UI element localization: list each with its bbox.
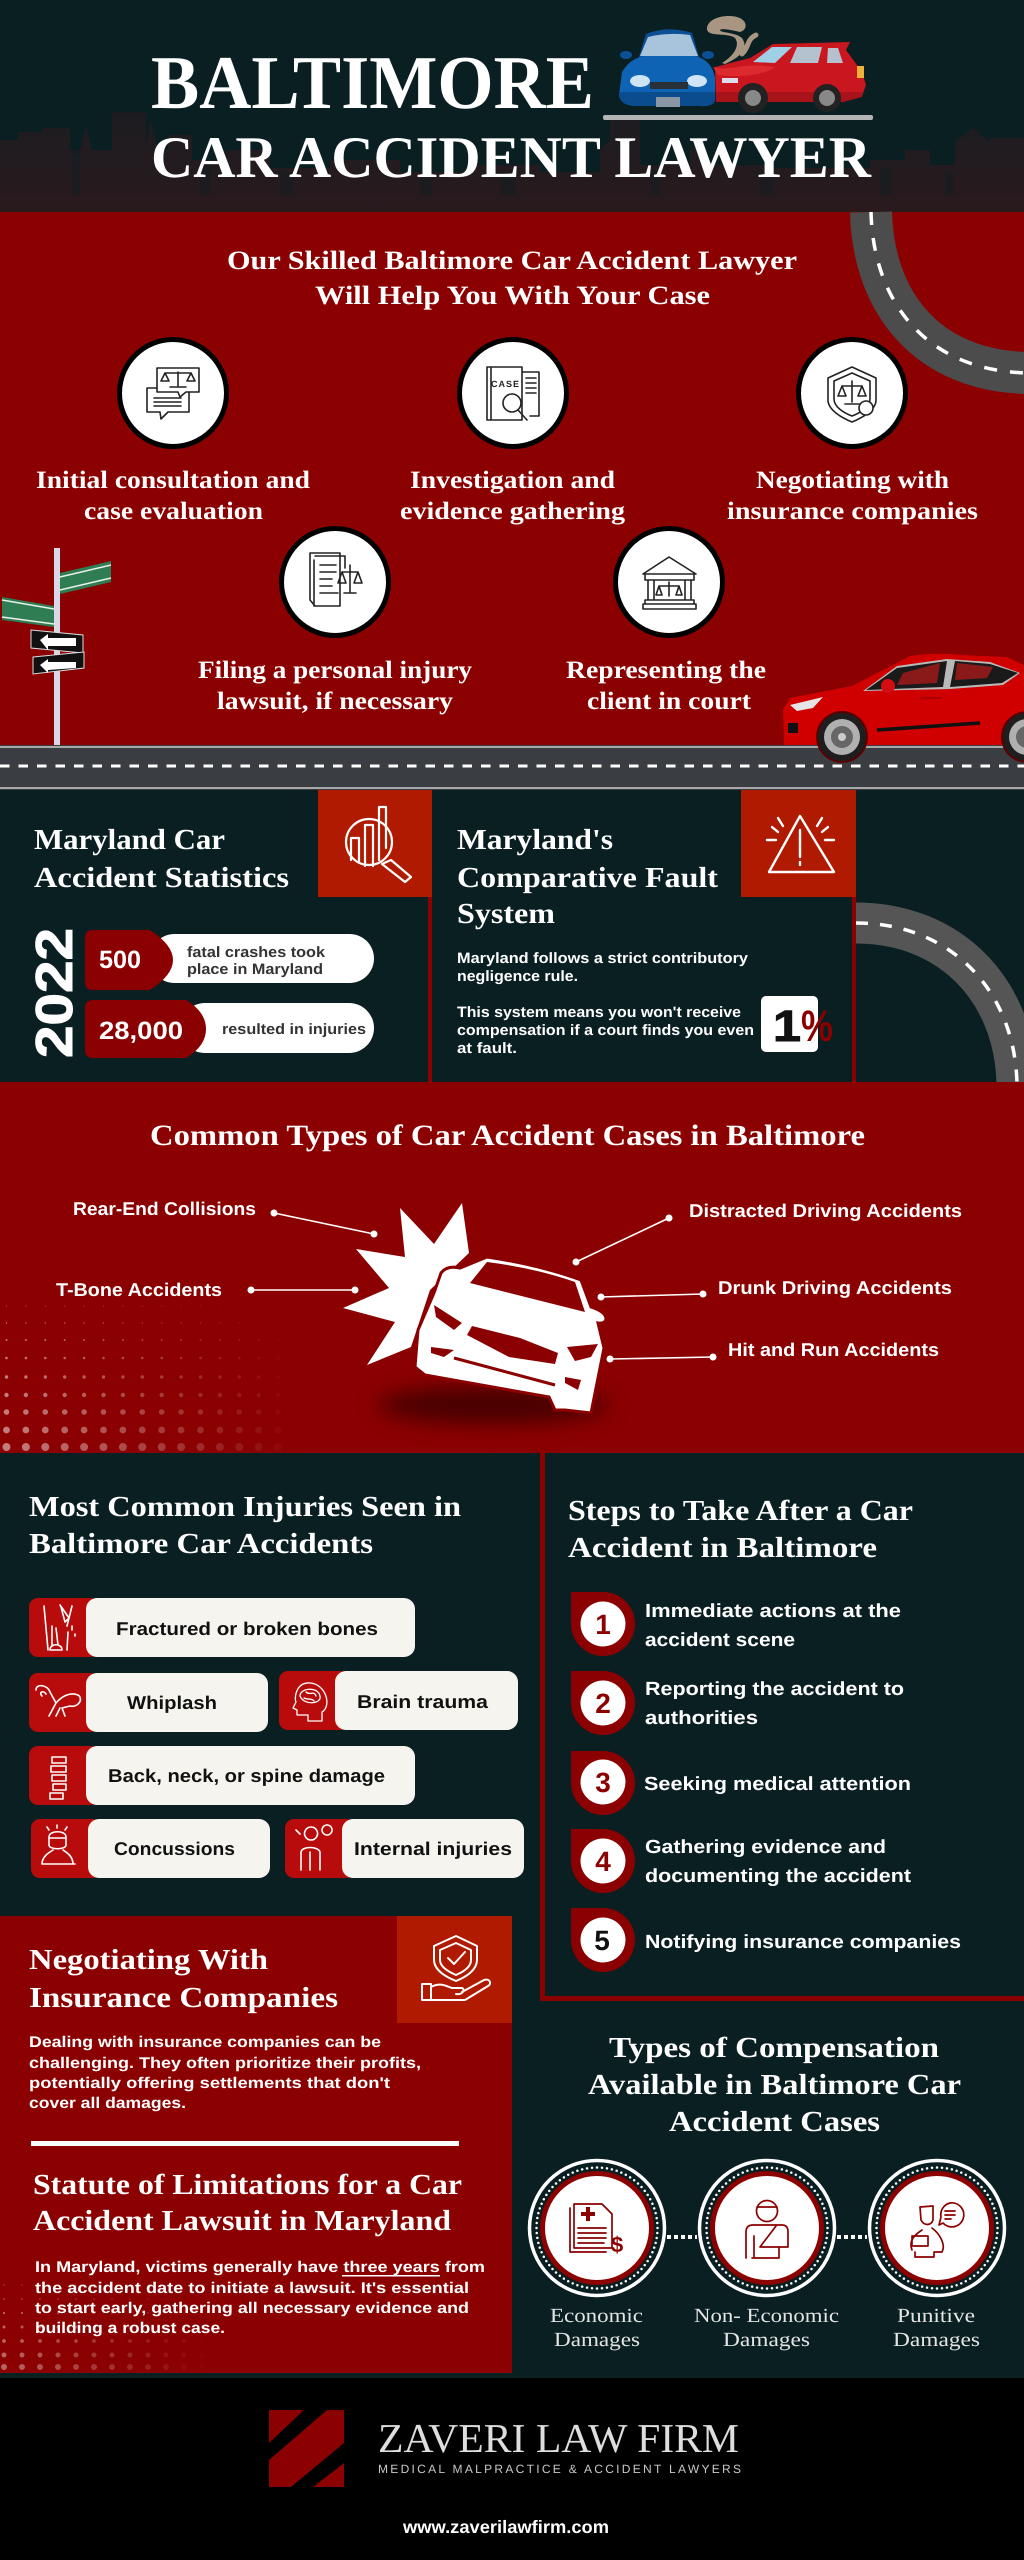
label: consultation: case evaluation (84, 498, 263, 525)
icon: punitive damages (870, 2160, 1004, 2296)
label: filing lawsuit: Filing a personal injury (198, 657, 473, 684)
website: www.zaverilawfirm.com (402, 2517, 609, 2537)
step 1 (571, 1592, 901, 1656)
label: filing lawsuit: lawsuit, if necessary (217, 688, 454, 715)
icon: insurance shield and hand (397, 1916, 512, 2023)
firm name: ZAVERI LAW FIRM (378, 2415, 739, 2461)
text: statute body: building a robust case. (35, 2320, 225, 2337)
text: negotiating body (29, 2034, 421, 2112)
heading: comparative fault: Comparative Fault (457, 862, 718, 894)
injury: spine damage: Back, neck, or spine damage (108, 1765, 385, 1786)
icon: economic damages (530, 2160, 664, 2296)
injury: fractured bones: Fractured or broken bones (116, 1618, 378, 1639)
label: court (566, 657, 766, 715)
title: CAR ACCIDENT LAWYER (151, 124, 872, 190)
injury: concussions: Concussions (114, 1838, 235, 1859)
step 3: Seeking medical attention (644, 1774, 911, 1795)
icon: one percent: % (801, 1002, 833, 1051)
text: statute body: the accident date to initiate a lawsuit. It's essential (35, 2280, 469, 2297)
curved road (871, 212, 1024, 373)
heading: Baltimore Car Accidents (29, 1528, 373, 1560)
step 4: documenting the accident (645, 1866, 912, 1887)
heading: Our Skilled Baltimore Car Accident Lawyer (227, 245, 797, 275)
label: consultation: Initial consultation and (36, 467, 310, 494)
label: court: Representing the (566, 657, 766, 684)
step 5 (571, 1908, 961, 1972)
corner road (856, 923, 1017, 1084)
heading: Most Common Injuries Seen in (29, 1491, 461, 1523)
label: negotiating: Negotiating with (756, 467, 949, 494)
panel: statistics and comparative fault (0, 790, 1024, 1084)
text: statute body: In Maryland, victims generally have three years from (35, 2259, 485, 2276)
text: comparative fault body (457, 950, 754, 1057)
text: negotiating body: cover all damages. (29, 2095, 186, 2112)
halftone dots (4, 2285, 210, 2367)
icon: economic damages: $ (611, 2232, 623, 2257)
heading: statistics: Maryland Car (34, 824, 225, 856)
heading: comparative fault: Maryland's (457, 824, 613, 856)
injury: internal injuries (285, 1819, 524, 1878)
icon: consultation (120, 340, 226, 446)
injury: internal injuries: Internal injuries (354, 1838, 512, 1859)
callout: t-bone accidents (56, 1279, 358, 1300)
label: economic: Economic (550, 2305, 643, 2327)
label: non-economic (694, 2305, 839, 2351)
injury: whiplash: Whiplash (127, 1692, 217, 1713)
step 5: Notifying insurance companies (645, 1932, 961, 1953)
callout: distracted driving (572, 1200, 962, 1266)
label: non-economic: Damages (723, 2329, 810, 2351)
icon: non-economic damages (700, 2160, 834, 2296)
title (151, 41, 872, 190)
icon: filing lawsuit (282, 528, 388, 636)
icon: magnifier chart (318, 790, 432, 897)
icon: one percent (761, 996, 833, 1052)
illustration: two crashed cars (603, 16, 873, 120)
label: filing lawsuit (198, 657, 473, 715)
heading: statute: Statute of Limitations for a Car (33, 2169, 462, 2201)
icon: investigation (460, 340, 566, 446)
step 3: 3 (595, 1767, 611, 1798)
label: punitive: Damages (893, 2329, 980, 2351)
stat: 28,000 injuries (85, 1000, 374, 1058)
heading: negotiating (29, 1944, 338, 2014)
label: consultation (36, 467, 310, 525)
heading: negotiating: Negotiating With (29, 1944, 268, 1976)
step 1: 1 (595, 1609, 611, 1640)
panel: common injuries (29, 1491, 524, 1878)
stat: 500 fatal crashes: fatal crashes took (187, 944, 326, 961)
connector dots (667, 2235, 867, 2239)
logo mark (269, 2410, 344, 2487)
callout: t-bone accidents: T-Bone Accidents (56, 1279, 222, 1300)
callout: rear-end collisions: Rear-End Collisions (73, 1198, 256, 1219)
icon: investigation: CASE (491, 379, 519, 389)
label: economic (550, 2305, 643, 2351)
step 4: 4 (595, 1846, 611, 1877)
footer (0, 2378, 1024, 2560)
panel: common types of accidents (0, 1082, 1024, 1453)
text: comparative fault body: at fault. (457, 1040, 517, 1057)
callout: drunk driving: Drunk Driving Accidents (718, 1277, 952, 1298)
label: punitive (893, 2305, 980, 2351)
firm name: MEDICAL MALPRACTICE & ACCIDENT LAWYERS (378, 2462, 741, 2476)
heading: Accident in Baltimore (568, 1532, 877, 1564)
step 4 (571, 1829, 912, 1893)
street sign post (2, 548, 111, 745)
stat: 500 fatal crashes (85, 930, 374, 990)
callout: hit and run (606, 1339, 939, 1362)
text: negotiating body: challenging. They often prioritize their profits, (29, 2055, 421, 2072)
step 2: Reporting the accident to (645, 1679, 904, 1700)
heading: Will Help You With Your Case (315, 280, 710, 310)
city skyline silhouette (0, 112, 1024, 213)
step 1: accident scene (645, 1630, 795, 1651)
heading: Steps to Take After a Car (568, 1495, 913, 1527)
text: negotiating body: Dealing with insurance companies can be (29, 2034, 381, 2051)
heading: statistics (34, 824, 289, 894)
heading: Types of Compensation (609, 2032, 939, 2064)
heading: statute: Accident Lawsuit in Maryland (33, 2205, 451, 2237)
stat: 500 fatal crashes: place in Maryland (187, 961, 323, 978)
heading: Common Types of Car Accident Cases in Baltimore (150, 1120, 865, 1152)
halftone dots (6, 1306, 300, 1447)
label: investigation: Investigation and (410, 467, 615, 494)
injury: spine damage (29, 1746, 415, 1805)
panel: negotiating and statute of limitations (0, 1916, 512, 2373)
title: BALTIMORE (151, 41, 594, 125)
icon: negotiating (798, 340, 906, 446)
step 5: 5 (594, 1925, 610, 1956)
step 4: Gathering evidence and (645, 1837, 886, 1858)
text: comparative fault body: compensation if a court finds you even (457, 1022, 754, 1039)
injury: fractured bones (29, 1598, 415, 1657)
label: investigation (400, 467, 626, 525)
injury: concussions (31, 1819, 270, 1878)
heading: statistics: Accident Statistics (34, 862, 289, 894)
stat: 28,000 injuries: resulted in injuries (222, 1021, 366, 1038)
step 2: authorities (645, 1708, 758, 1729)
icon: one percent: 1 (773, 1002, 801, 1051)
step 2: 2 (595, 1688, 611, 1719)
callout: distracted driving: Distracted Driving Accidents (689, 1200, 962, 1221)
heading: negotiating: Insurance Companies (29, 1982, 338, 2014)
heading (588, 2032, 961, 2138)
text: comparative fault body: negligence rule. (457, 968, 578, 985)
year label: 2022 (26, 928, 84, 1058)
text: comparative fault body: Maryland follows a strict contributory (457, 950, 749, 967)
road (0, 745, 1024, 790)
step 3 (571, 1751, 911, 1815)
panel: types of compensation (530, 2032, 1004, 2351)
label: non-economic: Non- Economic (694, 2305, 839, 2327)
stat: 500 fatal crashes: 500 (99, 946, 141, 974)
text: statute body (35, 2259, 485, 2337)
heading: Accident Cases (669, 2106, 880, 2138)
label: punitive: Punitive (897, 2305, 975, 2327)
step 1: Immediate actions at the (645, 1601, 901, 1622)
step 2 (571, 1671, 904, 1735)
text: negotiating body: potentially offering settlements that don't (29, 2075, 390, 2092)
heading: comparative fault (457, 824, 718, 930)
heading: statute (33, 2169, 462, 2237)
label: court: client in court (587, 688, 752, 715)
stat: 28,000 injuries: 28,000 (99, 1017, 183, 1045)
icon: warning (741, 790, 856, 897)
header panel (0, 0, 1024, 213)
label: negotiating (727, 467, 978, 525)
heading (568, 1495, 913, 1564)
callout: drunk driving (598, 1277, 952, 1300)
injury: whiplash (29, 1673, 268, 1732)
panel: lower dark background (0, 1453, 1024, 2378)
label: investigation: evidence gathering (400, 498, 626, 525)
label: negotiating: insurance companies (727, 498, 978, 525)
heading (29, 1491, 461, 1560)
heading (227, 245, 797, 310)
panel: steps to take (540, 1453, 1024, 2001)
callout: rear-end collisions (73, 1198, 378, 1238)
panel: how our lawyer helps (0, 212, 1024, 790)
icon: court (616, 528, 722, 636)
text: comparative fault body: This system means you won't receive (457, 1004, 741, 1021)
injury: brain trauma: Brain trauma (357, 1691, 489, 1712)
injury: brain trauma (279, 1671, 518, 1730)
illustration: crashed car with impact burst (343, 1203, 608, 1424)
text: statute body: to start early, gathering all necessary evidence and (35, 2300, 469, 2317)
illustration: red car (783, 654, 1024, 763)
label: economic: Damages (554, 2329, 640, 2351)
heading: comparative fault: System (457, 898, 555, 930)
heading: Available in Baltimore Car (588, 2069, 961, 2101)
callout: hit and run: Hit and Run Accidents (728, 1339, 939, 1360)
